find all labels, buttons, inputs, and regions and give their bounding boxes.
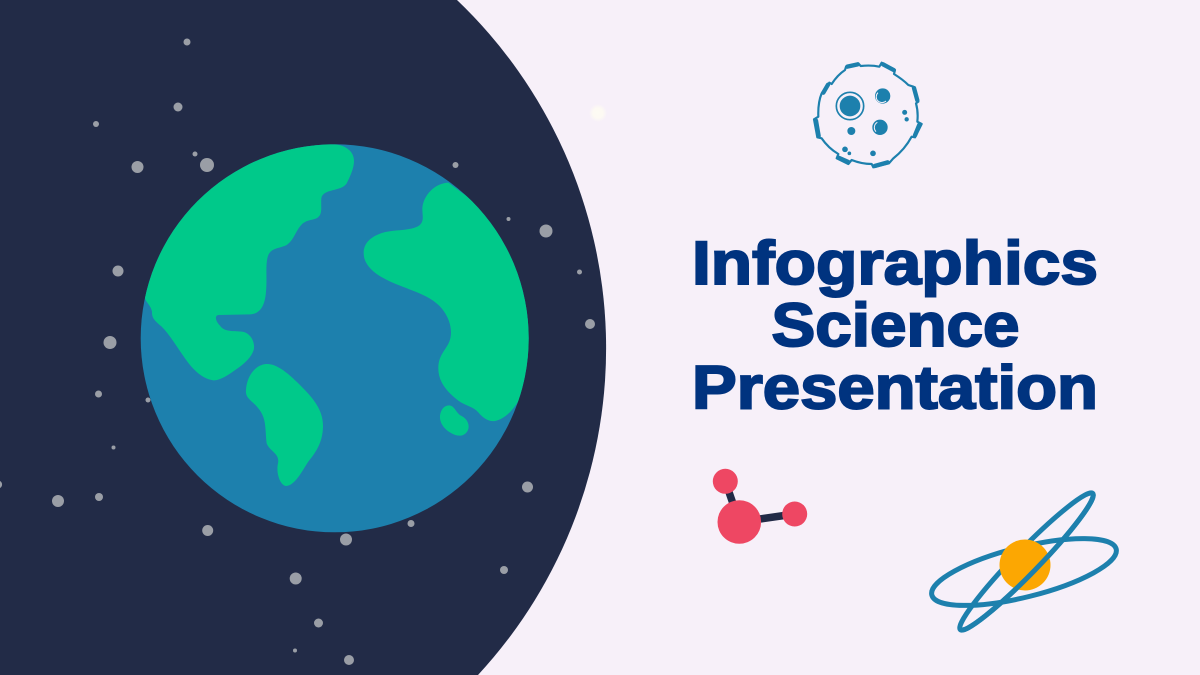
asteroid craters [836,88,909,156]
title: Presentation [692,354,1098,422]
stars [0,38,595,665]
soft light glow [589,104,607,122]
icon: molecule [713,469,807,544]
asteroid rim bumps [816,64,919,166]
continent: north west [137,135,354,380]
icon: atom with orbits [926,485,1122,638]
asteroid outline [814,63,922,167]
continent: east [364,182,529,422]
title [692,229,1098,422]
continent: south america [246,364,323,486]
title: Infographics [692,229,1098,297]
dark space semicircle [0,0,606,675]
icon: asteroid [814,63,922,167]
title: Science [772,291,1020,359]
earth globe [140,144,529,532]
continent: small island [440,405,469,436]
